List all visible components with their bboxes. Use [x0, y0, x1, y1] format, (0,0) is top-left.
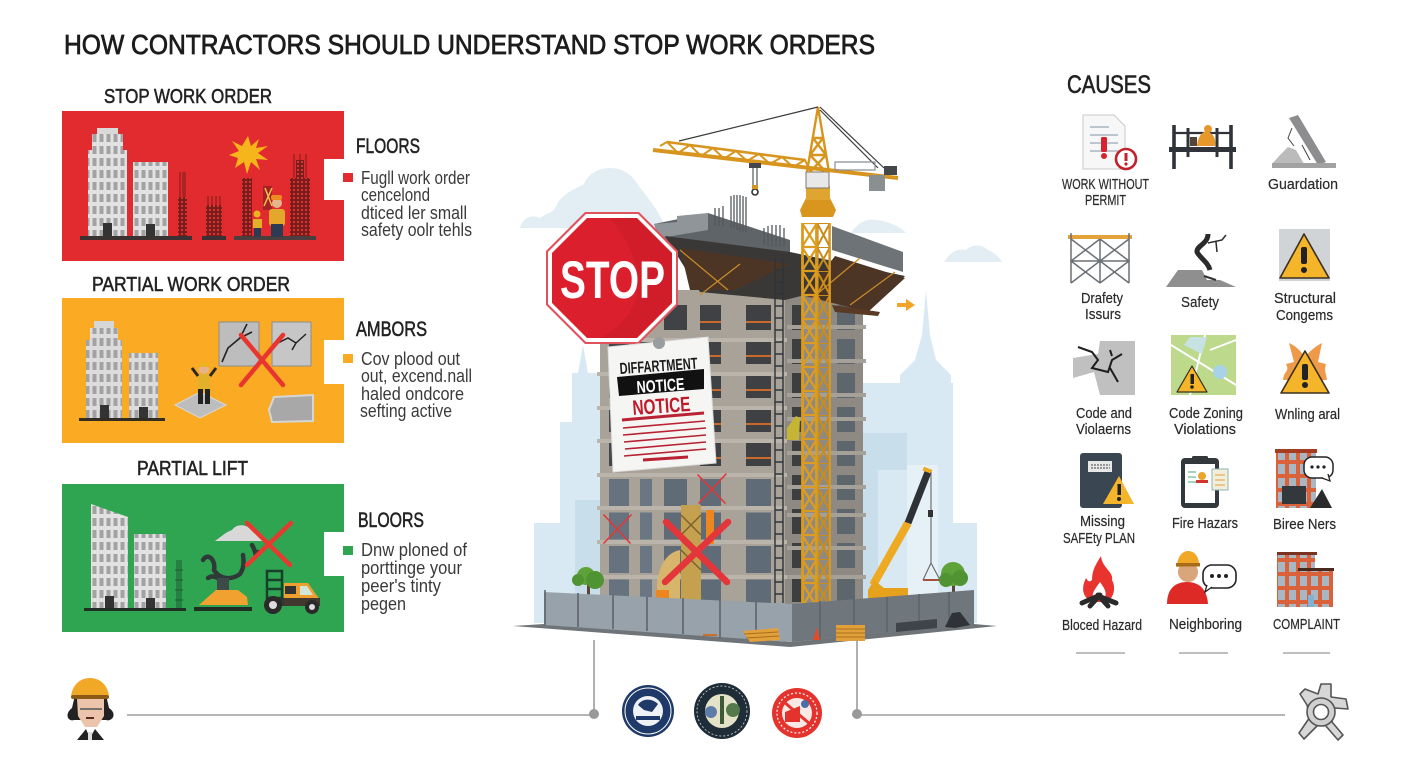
cause: safety: Safety: [1181, 294, 1219, 311]
connector: right: [852, 640, 1285, 719]
cause: neighboring: Neighboring: [1169, 616, 1242, 633]
icon: office buildings: [79, 321, 165, 421]
fence: [544, 590, 974, 642]
notice poster: NOTICE: [632, 393, 691, 420]
stop sign: [546, 212, 678, 344]
cause: work without permit: WORK WITHOUT: [1062, 176, 1149, 193]
cause: safety: [1166, 234, 1236, 311]
cause: drafety issues: Issurs: [1085, 306, 1121, 323]
seal: red: [772, 688, 822, 738]
heading: causes: CAUSES: [1067, 71, 1151, 99]
icon: workers: [253, 186, 285, 237]
cause: code zoning violations: Code Zoning: [1169, 405, 1243, 422]
icon: uprooted debris on base: [194, 545, 258, 611]
text block: bloors: BLOORS: [358, 509, 424, 532]
cause: warning flames: [1275, 343, 1340, 423]
cause: code violations: Violaerns: [1076, 421, 1131, 438]
cause: complaint: [1273, 552, 1340, 633]
cause: structural concerns: Structural: [1274, 290, 1336, 307]
cause: fire hazards: [1172, 456, 1238, 532]
cause: fire hazards: Fire Hazars: [1172, 515, 1238, 532]
cause: missing safety plan: [1063, 453, 1135, 547]
cause: work without permit: PERMIT: [1085, 192, 1126, 209]
cause: code zoning violations: Violations: [1174, 421, 1236, 438]
icon: stone slab: [269, 395, 313, 422]
cause: guardation: [1268, 115, 1338, 193]
tower crane: [653, 107, 898, 603]
trees: [572, 562, 968, 603]
heading: stop work order: STOP WORK ORDER: [104, 86, 272, 108]
text block: bloors: [343, 509, 468, 614]
text block: floors: cencelond: [361, 185, 430, 205]
text block: bloors: peer's tinty: [361, 576, 441, 596]
ladder: [775, 258, 783, 603]
red x marks: [604, 474, 728, 582]
notice poster: NOTICE: [636, 375, 685, 397]
text block: floors: dticed ler small: [361, 203, 467, 223]
materials on ground: [703, 612, 970, 642]
icon: rebar columns: [173, 154, 316, 240]
icon: worker on slab: [175, 363, 226, 418]
text block: floors: Fugll work order: [361, 168, 470, 188]
text block: bloors: pegen: [361, 594, 406, 614]
cause: complaint: COMPLAINT: [1273, 616, 1340, 633]
cause: missing safety plan: Missing: [1080, 513, 1125, 530]
arrow: [897, 299, 915, 311]
icon: cloud: [215, 525, 262, 541]
cause: drafety issues: Drafety: [1081, 290, 1123, 307]
notice poster: DIFFARTMENT: [619, 356, 698, 378]
seal: blue: [622, 685, 674, 737]
title: HOW CONTRACTORS SHOULD UNDERSTAND STOP WORK ORDERS: [64, 29, 875, 60]
text block: ambors: AMBORS: [356, 318, 427, 341]
building facades: [597, 290, 866, 605]
panel: partial lift: [62, 484, 344, 632]
cause: missing safety plan: SAFEty PLAN: [1063, 530, 1135, 547]
seal: dark green: [694, 683, 750, 739]
illustration: construction site under stop work order: [513, 107, 1002, 647]
cause: code zoning violations: [1169, 335, 1243, 438]
clouds: [520, 168, 1002, 262]
text block: floors: [343, 135, 472, 240]
cause: code violations: [1073, 341, 1135, 438]
text block: floors: FLOORS: [356, 135, 420, 158]
cause: neighbors building: Biree Ners: [1273, 516, 1336, 533]
text block: bloors: Dnw ploned of: [361, 540, 468, 560]
cause: blocked hazard: [1062, 556, 1142, 634]
icon: office buildings: [84, 504, 186, 611]
short rules: [1076, 652, 1330, 654]
cause: guardation: Guardation: [1268, 176, 1338, 193]
text block: ambors: sefting active: [360, 401, 452, 421]
boarded column and large red x: [656, 416, 800, 608]
cause: structural concerns: Congems: [1276, 307, 1333, 324]
text block: bloors: porttinge your: [361, 558, 462, 578]
rooftop and formwork: [654, 195, 905, 603]
cause: warning flames: Wnling aral: [1275, 406, 1340, 423]
text block: ambors: Cov plood out: [361, 349, 460, 369]
text block: floors: safety oolr tehls: [361, 220, 472, 240]
cause: neighboring: [1167, 551, 1242, 633]
heading: partial lift: PARTIAL LIFT: [137, 458, 248, 480]
cause: code violations: Code and: [1076, 405, 1132, 422]
cause: structural concerns: [1274, 229, 1336, 324]
cause: blocked hazard: Bloced Hazard: [1062, 617, 1142, 634]
skyline background: [534, 290, 977, 623]
icon: sun burst: [229, 136, 268, 174]
cause: drafety issues: [1068, 233, 1132, 323]
icon: gear tool: [1299, 684, 1348, 740]
text block: ambors: [343, 318, 472, 421]
notice poster: [608, 337, 716, 472]
panel: stop work order: [62, 111, 344, 261]
cause: neighbors building: [1273, 449, 1336, 533]
icon: cracked tiles: [219, 322, 311, 366]
icon: red x: [241, 335, 283, 385]
icon: office buildings: [80, 128, 175, 240]
cause: guardrail icon: [1169, 125, 1236, 169]
heading: partial work order: PARTIAL WORK ORDER: [92, 274, 290, 296]
text block: ambors: haled ondcore: [361, 384, 464, 404]
icon: contractor avatar: [68, 678, 114, 740]
icon: truck: [264, 571, 320, 614]
cause: work without permit: [1062, 115, 1149, 209]
text block: ambors: out, excend.nall: [361, 366, 472, 386]
connector: left: [127, 640, 599, 719]
mobile crane: [868, 467, 940, 599]
panel: partial work order: [62, 298, 344, 443]
ground slab: [513, 624, 997, 647]
icon: red x: [247, 523, 291, 565]
stop sign: STOP: [560, 251, 665, 310]
